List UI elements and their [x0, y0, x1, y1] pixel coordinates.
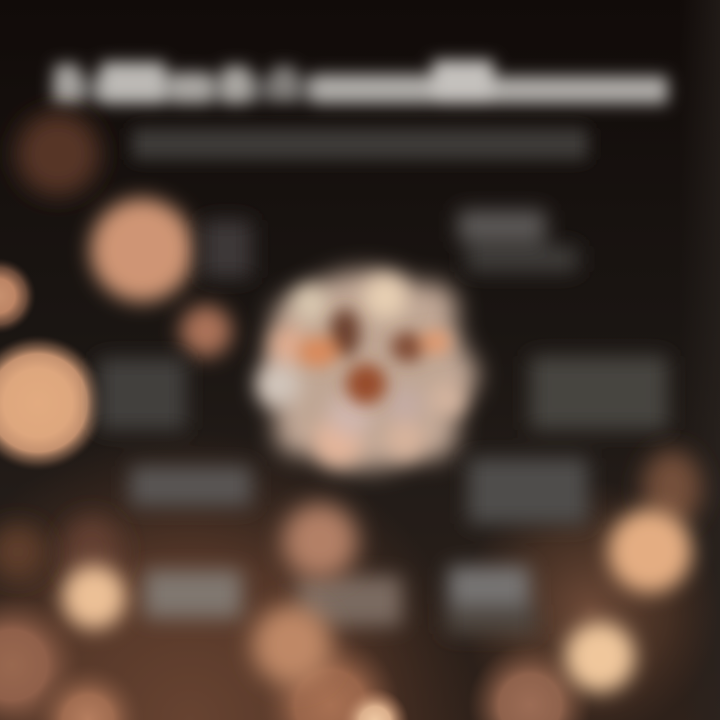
bokeh: bottom right glow [565, 622, 635, 692]
bokeh: centre lower [282, 503, 358, 579]
bokeh: right cluster [608, 509, 692, 593]
bokeh: left edge [0, 256, 36, 336]
bokeh: far left dim [0, 524, 46, 580]
subtitle (illegible in the blurred reference) [132, 128, 588, 160]
bokeh: large peach [90, 198, 194, 302]
bokeh: left glow [62, 565, 126, 629]
central flower illustration [256, 270, 478, 470]
label: upper left [202, 220, 252, 278]
bokeh: large left [0, 335, 106, 471]
bokeh: right cluster top [642, 450, 702, 526]
bokeh: small orange [180, 305, 232, 357]
title (illegible in the blurred reference) [52, 60, 668, 104]
bokeh: bottom right dim [468, 643, 592, 720]
label: upper right [458, 210, 578, 272]
bokeh: bottom left small [32, 664, 144, 720]
bokeh: dark top left [16, 112, 100, 196]
bokeh: bottom centre field [260, 635, 400, 720]
bokeh: bottom edge glow [341, 688, 409, 720]
flower centre [298, 309, 451, 404]
flower body [266, 270, 478, 470]
left bokeh circles [0, 112, 232, 471]
lower bokeh circles [0, 450, 702, 720]
label: bottom right [446, 566, 536, 634]
label: middle right [530, 356, 668, 430]
text labels (illegible in the blurred reference) [98, 210, 668, 634]
label: lower left [130, 466, 252, 506]
label: middle left [98, 358, 186, 430]
flower petals [256, 275, 466, 466]
bokeh: bottom centre-left [252, 605, 332, 685]
label: lower right [468, 458, 588, 524]
label: bottom centre [298, 576, 402, 626]
label: bottom left [144, 570, 242, 618]
bokeh: upper left glow halo [62, 516, 122, 588]
bokeh: bottom left dim [0, 596, 82, 720]
